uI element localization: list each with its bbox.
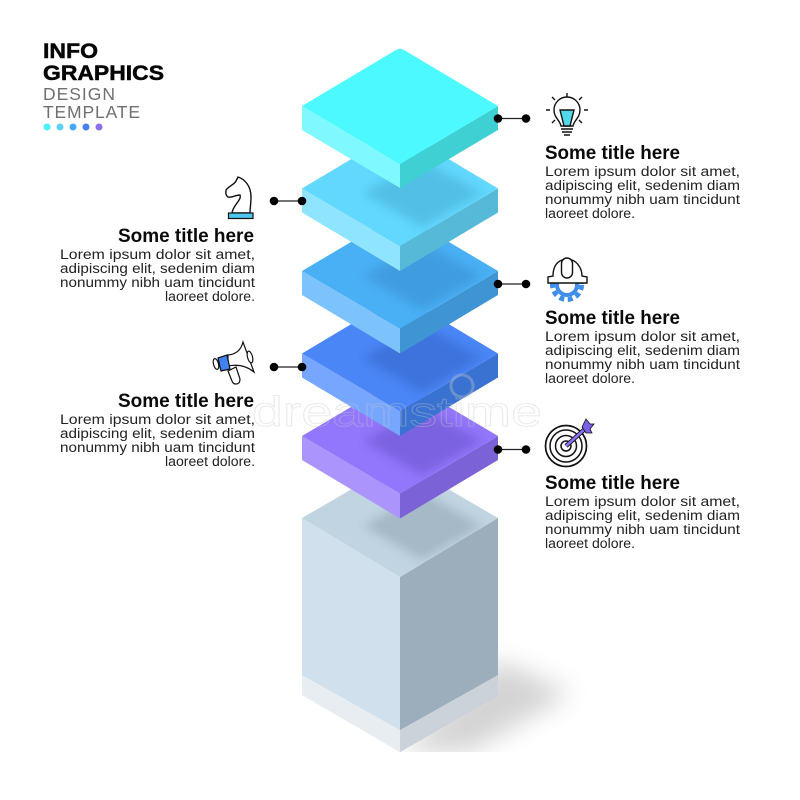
text block: middle right: laoreet dolore. bbox=[545, 371, 635, 386]
text block: top right: adipiscing elit, sedenim diam bbox=[545, 178, 740, 193]
text block: middle right: adipiscing elit, sedenim diam bbox=[545, 343, 740, 358]
icon: chess knight bbox=[226, 177, 253, 218]
ground shadow bbox=[400, 660, 572, 752]
layer 1: cyan bbox=[302, 49, 498, 188]
text block: lower left: nonummy nibh uam tincidunt bbox=[60, 440, 255, 455]
text block: upper left: Some title here bbox=[118, 226, 254, 247]
title block: TEMPLATE bbox=[43, 102, 140, 122]
text block: middle right: Some title here bbox=[545, 308, 680, 329]
layer 2: light blue bbox=[302, 147, 498, 271]
text block: bottom right: Lorem ipsum dolor sit amet, bbox=[545, 494, 740, 509]
text block: middle right: nonummy nibh uam tincidunt bbox=[545, 357, 740, 372]
text block: lower left: Some title here bbox=[118, 391, 254, 412]
text block: upper left: Lorem ipsum dolor sit amet, bbox=[60, 247, 255, 262]
layer 3: sky blue bbox=[302, 230, 498, 354]
text block: bottom right: nonummy nibh uam tincidunt bbox=[545, 522, 740, 537]
text block: top right: Some title here bbox=[545, 143, 680, 164]
connector 2 bbox=[270, 197, 306, 205]
text block: upper left bbox=[60, 226, 255, 304]
text block: upper left: nonummy nibh uam tincidunt bbox=[60, 275, 255, 290]
icon: megaphone bbox=[212, 342, 254, 384]
text block: upper left: adipiscing elit, sedenim diam bbox=[60, 261, 255, 276]
title block: GRAPHICS bbox=[43, 62, 164, 85]
text block: top right: nonummy nibh uam tincidunt bbox=[545, 192, 740, 207]
icon: helmet and gear bbox=[548, 258, 587, 300]
text block: top right: laoreet dolore. bbox=[545, 206, 635, 221]
layer 5: purple bbox=[302, 394, 498, 518]
title block bbox=[43, 40, 164, 130]
text block: lower left: laoreet dolore. bbox=[165, 454, 255, 469]
watermark bbox=[252, 375, 542, 435]
icon: target with arrow bbox=[546, 419, 594, 466]
layer 4: royal blue bbox=[302, 312, 498, 436]
text block: lower left bbox=[60, 391, 255, 469]
text block: lower left: Lorem ipsum dolor sit amet, bbox=[60, 412, 255, 427]
text block: middle right: Lorem ipsum dolor sit amet, bbox=[545, 329, 740, 344]
text block: top right: Lorem ipsum dolor sit amet, bbox=[545, 164, 740, 179]
base block bbox=[302, 461, 498, 752]
text block: top right bbox=[545, 143, 740, 221]
text block: bottom right bbox=[545, 473, 740, 551]
title block: INFO bbox=[43, 40, 98, 63]
text block: lower left: adipiscing elit, sedenim diam bbox=[60, 426, 255, 441]
text block: bottom right: Some title here bbox=[545, 473, 680, 494]
connector 5 bbox=[494, 445, 530, 454]
connector 1 bbox=[494, 114, 530, 123]
title block: DESIGN bbox=[43, 84, 115, 104]
connector 3 bbox=[494, 280, 530, 288]
text block: middle right bbox=[545, 308, 740, 386]
connector 4 bbox=[270, 363, 306, 371]
text block: bottom right: adipiscing elit, sedenim diam bbox=[545, 508, 740, 523]
icon: light bulb bbox=[546, 93, 588, 135]
text block: upper left: laoreet dolore. bbox=[165, 289, 255, 304]
text block: bottom right: laoreet dolore. bbox=[545, 536, 635, 551]
watermark: dreamstime bbox=[252, 388, 542, 435]
